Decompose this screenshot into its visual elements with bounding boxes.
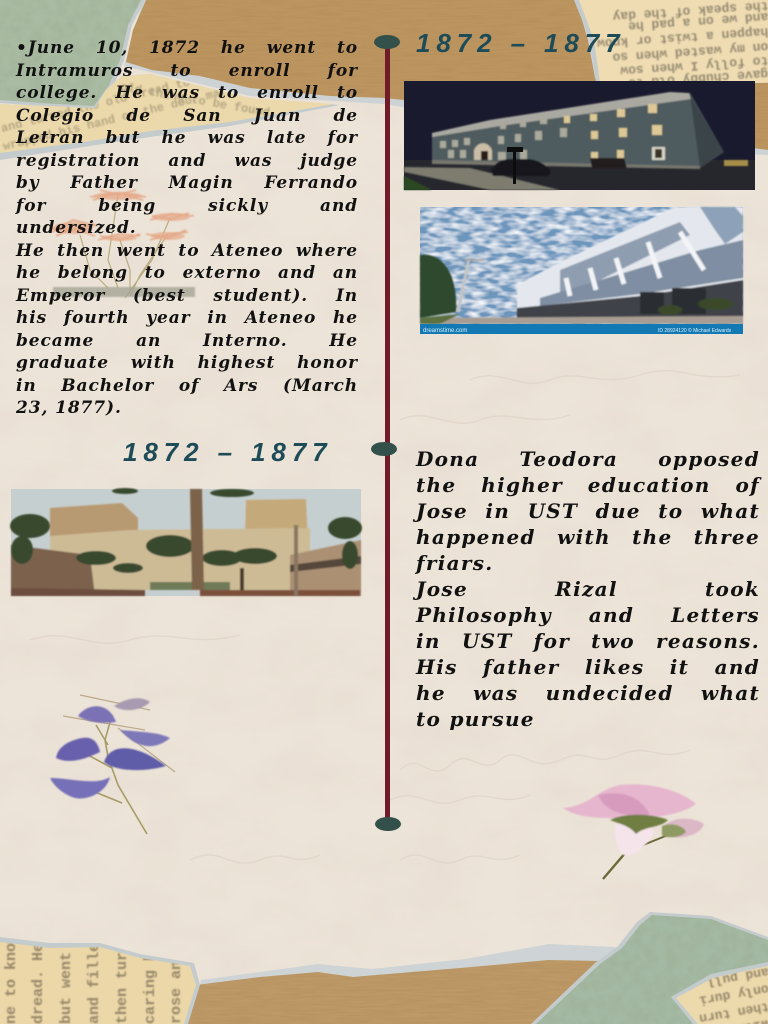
torn paper: bottom left newspaper [0, 937, 200, 1024]
text block: Ateneo years: his fourth year in Ateneo he [16, 308, 358, 328]
timeline [371, 35, 401, 831]
torn paper: bottom left newspaper: rose and [168, 952, 185, 1024]
text block: Ateneo years: registration and was judge [16, 150, 358, 170]
torn paper: bottom brown [186, 944, 615, 1024]
text block: University of Santo Tomas: Jose in UST due to what [416, 499, 760, 523]
text block: University of Santo Tomas: he was undecided what [416, 681, 760, 705]
torn paper: green top left [0, 0, 145, 108]
torn paper: newspaper strip left [0, 68, 340, 160]
text block: Ateneo years: He then went to Ateneo where [16, 240, 358, 260]
text block: Ateneo years: Emperor (best student). In [16, 286, 358, 306]
heading: date left: 1872 – 1877 [123, 437, 332, 467]
text block: Ateneo years: in Bachelor of Ars (March [16, 376, 358, 396]
icon: pink rose [563, 784, 704, 879]
text block: Ateneo years: Colegio de San Juan de [16, 106, 358, 126]
text block: University of Santo Tomas: happened with the three [416, 525, 760, 549]
torn paper: bottom left newspaper: dread. He [30, 943, 47, 1024]
picture: UST building by day: ID 28924120 © Michael Edwards [658, 327, 732, 334]
torn paper: newspaper strip left: and turned the old dread to the [0, 68, 220, 136]
picture: old Letran courtyard [10, 488, 362, 596]
text block: Ateneo years: college. He was to enroll to [16, 83, 358, 103]
torn paper: bottom left newspaper: ne to know [3, 934, 20, 1024]
torn paper: newspaper strip left: old thing to be found [119, 80, 271, 120]
text block: University of Santo Tomas: to pursue [416, 707, 535, 731]
text block: University of Santo Tomas: the higher education of [416, 473, 760, 497]
text block: Ateneo years: for being sickly and [16, 196, 358, 216]
text block: Ateneo years: became an Interno. He [16, 330, 358, 350]
faint script marks on paper [30, 371, 740, 863]
torn paper: newspaper top right: gave chubby old to [627, 66, 768, 91]
torn paper: brown top [124, 0, 768, 155]
icon: purple pressed flower [50, 695, 175, 834]
torn paper: newspaper top right: must like the and one [604, 79, 768, 105]
torn paper: bottom left newspaper: and filled [86, 934, 103, 1024]
torn paper: bottom right newspaper: only duri [698, 981, 768, 1008]
text block: Ateneo years: undersized. [16, 218, 137, 238]
text block: Ateneo years: by Father Magin Ferrando [16, 173, 358, 193]
torn paper: newspaper top right: to folly I when sow [620, 53, 768, 78]
text block: University of Santo Tomas: friars. [416, 551, 494, 575]
picture: night rendering of Ateneo building [404, 81, 755, 190]
text block: University of Santo Tomas: Philosophy and Letters [416, 603, 760, 627]
torn paper: bottom left newspaper: but went st [58, 925, 75, 1024]
text block: Ateneo years: 23, 1877). [16, 398, 122, 418]
text block: University of Santo Tomas: His father likes it and [416, 655, 760, 679]
torn paper: bottom right green [531, 912, 768, 1024]
text block: University of Santo Tomas: Jose Rizal took [416, 577, 760, 601]
torn paper: newspaper top right [574, 0, 768, 83]
text block: University of Santo Tomas: Dona Teodora opposed [416, 447, 760, 471]
text block: University of Santo Tomas [412, 447, 762, 731]
torn paper: newspaper strip left: wrapped his hand on the door mark [2, 83, 236, 154]
text block: Ateneo years: he belong to externo and an [16, 263, 358, 283]
torn paper: newspaper top right: happen a twist or know [596, 24, 768, 51]
orange dried flower [50, 190, 195, 298]
torn paper: newspaper top right: on my wasted when so [612, 39, 768, 65]
text block: Ateneo years [15, 38, 358, 418]
text block: University of Santo Tomas: in UST for two reasons. [416, 629, 760, 653]
text block: Ateneo years: Letran but he was late for [16, 128, 358, 148]
heading: date top right: 1872 – 1877 [416, 28, 626, 58]
torn paper: bottom left newspaper: caring his [142, 934, 159, 1024]
torn paper: newspaper top right: and we on a pad he [627, 9, 768, 34]
torn paper: bottom right newspaper: and pull [706, 964, 768, 990]
text block: Ateneo years: Intramuros to enroll for [16, 60, 358, 80]
picture: UST building by day: dreamstime.com [423, 328, 467, 334]
picture: UST building by day [420, 207, 743, 334]
torn paper: bottom left newspaper: then turne [114, 934, 131, 1024]
text block: Ateneo years: •June 10, 1872 he went to [16, 38, 358, 58]
torn paper: bottom right newspaper [671, 962, 768, 1024]
text block: Ateneo years: graduate with highest honor [16, 353, 358, 373]
